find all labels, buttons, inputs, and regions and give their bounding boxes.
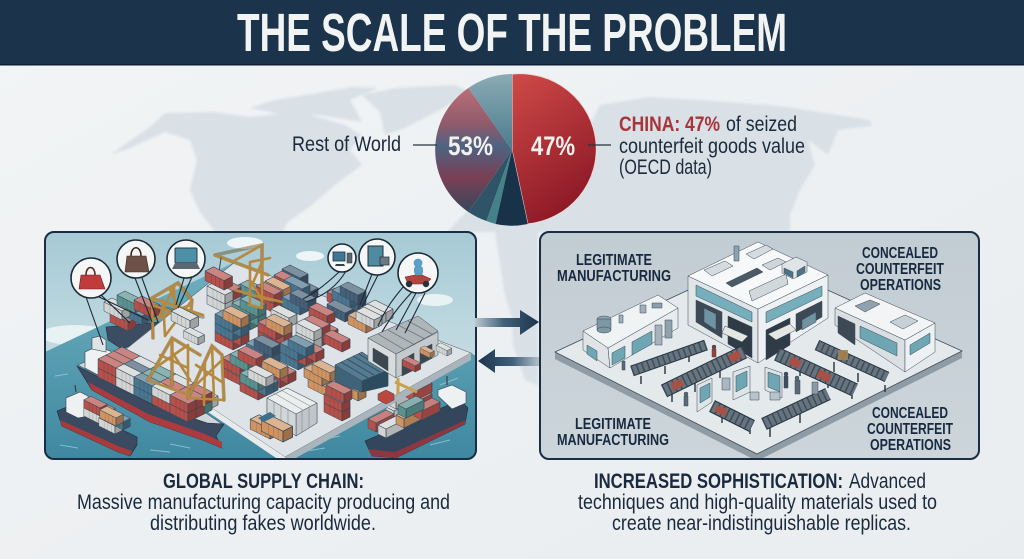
callout: China share: (OECD data) bbox=[619, 156, 712, 179]
warehouse bbox=[368, 316, 452, 378]
background world map bbox=[110, 85, 872, 385]
caption: global supply chain: distributing fakes worldwide. bbox=[150, 512, 376, 535]
label: concealed counterfeit operations bottom: OPERATIONS bbox=[870, 437, 951, 454]
caption: increased sophistication bbox=[578, 470, 937, 535]
factory floor platform bbox=[554, 290, 963, 458]
right building bbox=[835, 293, 935, 372]
arrow: right bbox=[475, 310, 539, 335]
label: legitimate manufacturing bottom: LEGITIMATE bbox=[575, 416, 651, 433]
conveyor belts: rear bbox=[632, 345, 887, 392]
label: legitimate manufacturing bottom bbox=[557, 416, 669, 449]
caption: increased sophistication: create near-indistinguishable replicas. bbox=[612, 512, 911, 535]
callout: toy car and teddy bbox=[398, 253, 438, 293]
slice: China 47% bbox=[512, 74, 596, 224]
caption: global supply chain bbox=[77, 470, 450, 535]
arrow: left bbox=[478, 349, 541, 373]
callout: China share: CHINA: 47% bbox=[619, 113, 720, 136]
caption: increased sophistication: techniques and high-quality materials used to bbox=[578, 491, 937, 514]
label: concealed counterfeit operations bottom: CONCEALED bbox=[872, 405, 948, 422]
callout tails bbox=[86, 271, 425, 345]
slice: rest of world main bbox=[435, 88, 512, 212]
label: legitimate manufacturing top bbox=[557, 252, 671, 285]
callout: China share: counterfeit goods value bbox=[619, 135, 805, 158]
gantry cranes bbox=[148, 245, 282, 405]
label: concealed counterfeit operations top bbox=[856, 245, 944, 294]
slice: thin teal bbox=[486, 150, 512, 224]
ship: large cargo bbox=[77, 336, 224, 448]
label: rest of world: Rest of World bbox=[292, 133, 401, 156]
callout: China share bbox=[588, 113, 805, 179]
label: concealed counterfeit operations top: COUNTERFEIT bbox=[856, 261, 944, 278]
callout: laptop bbox=[167, 240, 205, 278]
dark storage shed bbox=[335, 352, 394, 404]
white containers bbox=[250, 388, 317, 442]
ship: small front right bbox=[365, 376, 468, 458]
slice: navy bbox=[496, 150, 528, 226]
ship: small front left bbox=[57, 385, 137, 456]
slice: dark teal bbox=[468, 150, 512, 221]
callout: computer monitor bbox=[328, 244, 356, 272]
ship: back bbox=[104, 291, 160, 349]
callout: brown handbag bbox=[117, 240, 155, 278]
conveyor belts: front bbox=[664, 352, 855, 437]
label: concealed counterfeit operations top: CONCEALED bbox=[862, 245, 938, 262]
caption: global supply chain: Massive manufacturing capacity producing and bbox=[77, 491, 450, 514]
label 53%: 53% bbox=[448, 131, 493, 161]
caption: increased sophistication: INCREASED SOPHISTICATION: bbox=[594, 470, 843, 493]
main factory building bbox=[688, 242, 828, 363]
quay platform bbox=[125, 262, 471, 464]
label: legitimate manufacturing top: MANUFACTURING bbox=[557, 268, 671, 285]
panel: global supply chain port illustration bbox=[40, 232, 476, 464]
caption: increased sophistication: Advanced bbox=[849, 470, 926, 493]
callout: tablet devices bbox=[359, 239, 395, 275]
callout: China share: of seized bbox=[726, 113, 797, 136]
panel: increased sophistication factory illustration bbox=[540, 232, 979, 461]
slice: teal grey bbox=[468, 74, 512, 150]
caption: global supply chain: GLOBAL SUPPLY CHAIN: bbox=[163, 470, 364, 493]
label: concealed counterfeit operations bottom bbox=[867, 405, 953, 454]
callout: red handbag bbox=[71, 258, 111, 298]
label: concealed counterfeit operations top: OPERATIONS bbox=[860, 277, 941, 294]
label 47%: 47% bbox=[531, 131, 575, 161]
left building bbox=[583, 295, 678, 368]
label: legitimate manufacturing bottom: MANUFACTURING bbox=[557, 432, 669, 449]
forklift truck and crane on quay bbox=[258, 378, 417, 422]
pie chart bbox=[435, 74, 596, 226]
label: legitimate manufacturing top: LEGITIMATE bbox=[576, 252, 652, 269]
container stacks: yard bbox=[207, 265, 393, 421]
title: THE SCALE OF THE PROBLEM bbox=[237, 3, 787, 63]
header band bbox=[0, 0, 1024, 66]
label: concealed counterfeit operations bottom: COUNTERFEIT bbox=[867, 421, 953, 438]
machines and workers bbox=[622, 345, 818, 412]
